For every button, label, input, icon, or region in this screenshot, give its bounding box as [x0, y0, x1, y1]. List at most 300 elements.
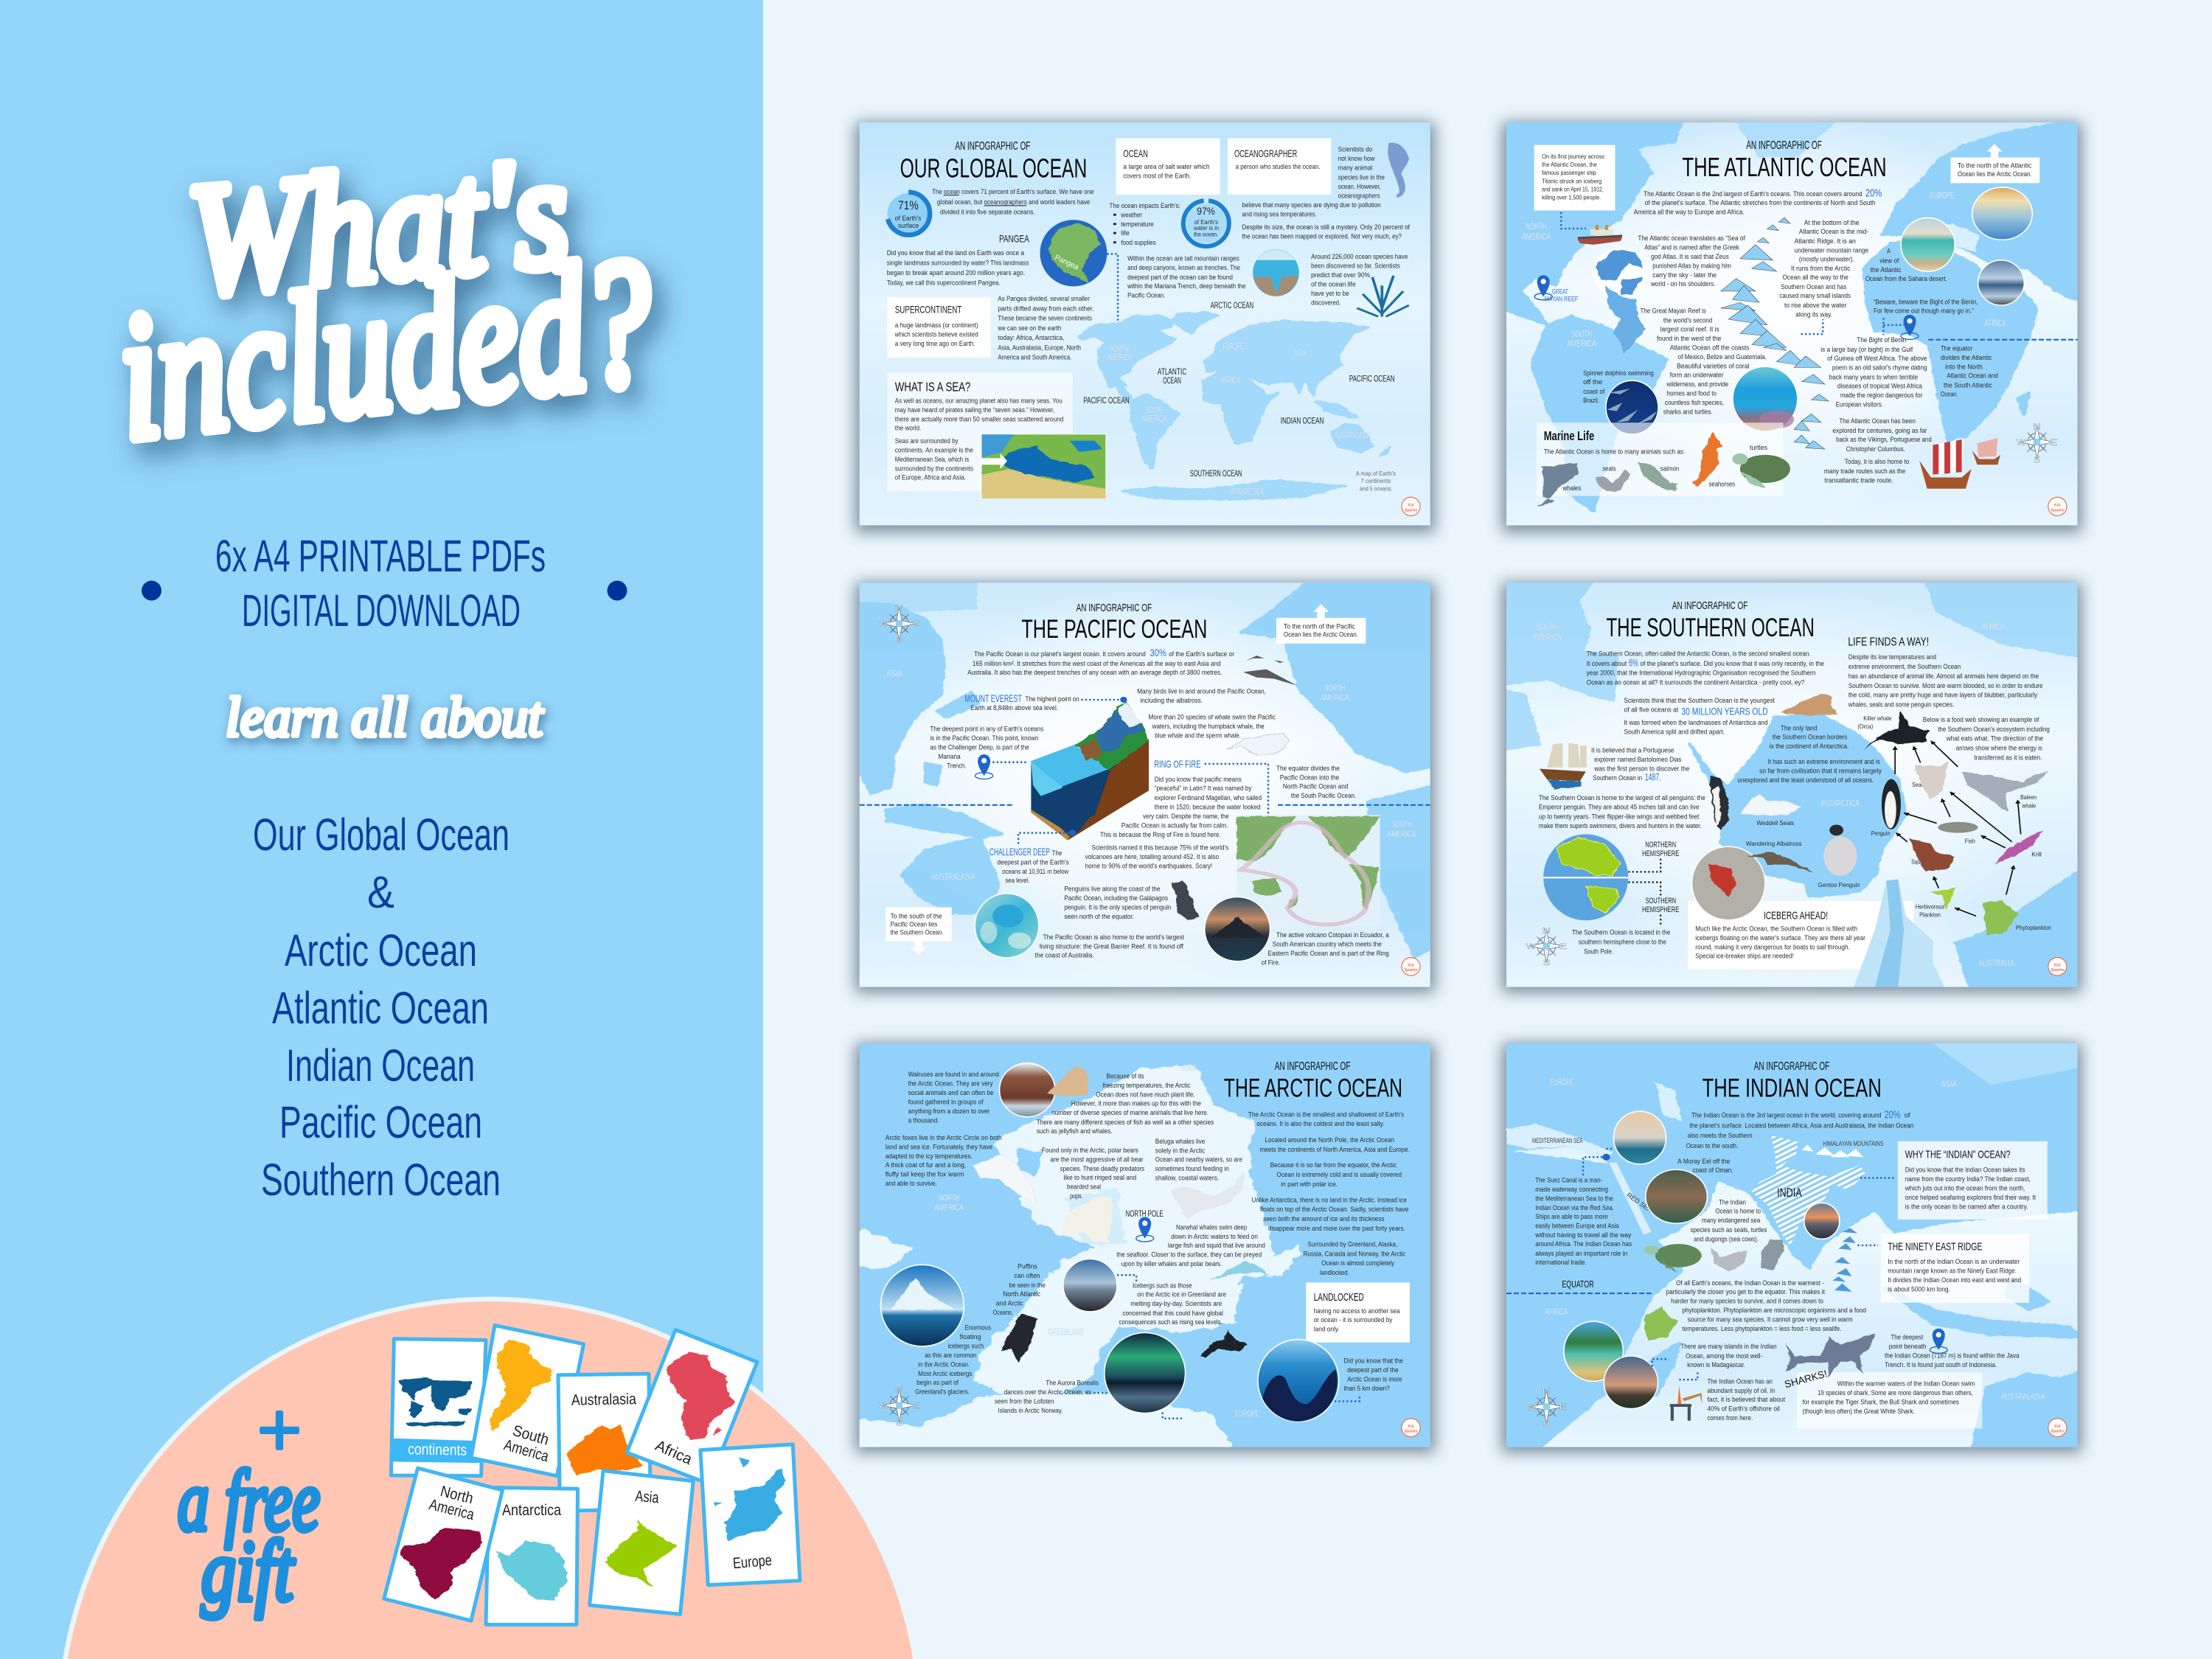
equator line [860, 804, 1430, 806]
text: Suez Canal: always played an important role in [1535, 1250, 1627, 1257]
map labels: PACIFIC OCEAN [1084, 396, 1130, 406]
intro text: year 2000, that the International Hydrographic Organisation recognised the Southern [1587, 669, 1815, 677]
box: south of Pacific [886, 908, 952, 942]
text: species discovered: been discovered so far. Scientists [1311, 262, 1400, 270]
definition box: oceanographer: a person who studies the ocean. [1236, 164, 1321, 171]
text: Great Mayan Reef: of Mexico, Belize and Guatemala. [1678, 354, 1767, 361]
intro text: Ocean as an ocean at all? It surrounds the continent Antarctica - pretty cool, ey? [1587, 679, 1804, 686]
text: whales: More than 20 species of whale swim the Pacific [1148, 714, 1276, 721]
card labels: South [511, 1422, 551, 1449]
text: species unknown: the ocean has been mapped or explored. Not very much, ey? [1242, 233, 1402, 240]
panel: The Southern Ocean: HEMISPHERE [1642, 905, 1679, 914]
impacts list: The ocean impacts Earth's: [1110, 202, 1180, 210]
land labels: AUSTRALIA [1979, 958, 2014, 968]
map labels: INDIAN OCEAN [1281, 417, 1324, 426]
map labels: ASIA [1294, 348, 1307, 358]
intro text: The Pacific Ocean is our planet's largest ocean. It covers around [974, 651, 1146, 658]
animal labels: Phytoplankton [2016, 925, 2051, 931]
text: Madagascar [1680, 1343, 1777, 1369]
text: Antarctica: the Southern Ocean borders [1773, 734, 1848, 741]
text: emperor penguins [1539, 795, 1705, 830]
text: equator [1941, 345, 1998, 398]
intro text [967, 647, 1234, 676]
marker: Challenger Deep [1018, 830, 1076, 844]
text: floating icebergs: begin as part of [917, 1380, 959, 1387]
text: food web intro: the Southern Ocean's ecosystem including [1938, 726, 2050, 733]
text: puffins: Puffins [1018, 1263, 1037, 1270]
text: southern hemisphere [1572, 929, 1670, 956]
text: Suez Canal: international trade. [1535, 1259, 1587, 1266]
map labels: OCEAN [1163, 376, 1181, 386]
text: oil [1707, 1378, 1786, 1422]
animal labels: Plankton [1919, 912, 1941, 919]
text: endangered species: species such as seals, turtles [1690, 1226, 1767, 1234]
box: sharks: Within the warmer waters of the Indian Ocean swim [1837, 1380, 1975, 1388]
logo: Kid Sparks: Kid [1408, 1425, 1414, 1428]
intro text: 20% [1865, 187, 1882, 199]
list of oceans: & [367, 867, 394, 917]
text: deepest part: Did you know that the [1344, 1357, 1403, 1365]
impacts list: life [1121, 230, 1130, 237]
gift text: + a free gift: gift [201, 1523, 296, 1619]
illustration: walrus [1046, 1065, 1089, 1096]
equator line [1928, 339, 2078, 341]
box: what is a sea: the world. [895, 425, 921, 432]
land labels: ASIA [1182, 1062, 1197, 1073]
box: iceberg ahead: Special ice-breaker ships are needed! [1695, 953, 1794, 960]
intro text [1686, 1108, 1913, 1150]
title: OUR GLOBAL OCEAN [900, 154, 1087, 184]
illustration: sailing ship [1540, 742, 1587, 789]
photo: island beach [1564, 1321, 1623, 1381]
map labels: MEDITERRANEAN SEA [1532, 1137, 1583, 1144]
box: supercontinent: which scientists believe existed [894, 331, 978, 338]
text: Antarctica: The only land [1781, 725, 1818, 732]
text: Arctic facts: Surrounded by Greenland, Alaska, [1307, 1241, 1397, 1248]
text: life finds a way: LIFE FINDS A WAY! [1848, 636, 1929, 649]
text: seven continents: These became the seven continents [998, 315, 1092, 322]
pale sea overlay [1921, 223, 1979, 251]
caption: map of Earth [1356, 470, 1396, 493]
text: Greenland icebergs: on the Arctic ice in Greenland are [1137, 1291, 1226, 1298]
animal labels: Fish [1965, 838, 1975, 845]
card: Asia [590, 1471, 693, 1614]
text: Madagascar: known is Madagascar. [1687, 1362, 1745, 1369]
box: why the Indian Ocean: WHY THE “INDIAN” OCEAN? [1905, 1148, 2011, 1161]
text: Suez Canal: The Suez Canal is a man- [1535, 1177, 1602, 1184]
land labels: AMERICA [1321, 693, 1349, 703]
text: explorers: Christopher Columbus. [1846, 445, 1905, 453]
text: Arctic foxes [886, 1135, 1002, 1188]
text: equator [1276, 765, 1356, 799]
text: polar bears [1042, 1147, 1144, 1200]
impacts list [1110, 202, 1180, 246]
text: Suez Canal [1534, 1177, 1632, 1266]
list of oceans: Arctic Ocean [285, 925, 477, 975]
text: Bartolomeo Dias [1591, 747, 1689, 783]
text: mid-Atlantic ridge [1779, 219, 1868, 319]
text: youngest ocean: Scientists think that the Southern Ocean is the youngest [1624, 698, 1775, 705]
text: Arctic facts: Ocean is extremely cold and is usually covered [1277, 1172, 1402, 1179]
food web arrows [1895, 741, 2021, 916]
logo: Kid Sparks: Kid [1408, 503, 1414, 507]
text: southern hemisphere: South Pole. [1584, 948, 1613, 956]
text: Ring of Fire: there in 1520, because the water looked [1155, 804, 1261, 811]
logo: Kid Sparks [1402, 1419, 1420, 1437]
list of oceans: Atlantic Ocean [272, 983, 489, 1033]
card labels: continents [408, 1441, 467, 1459]
text: beluga whales: Beluga whales live [1155, 1138, 1205, 1145]
box: landlocked: or ocean - it is surrounded by [1314, 1317, 1393, 1324]
text: youngest ocean: It was formed when the landmasses of Antarctica and [1624, 720, 1768, 727]
panel: The Atlantic Ocean: AFRICA [1984, 319, 2006, 329]
text: seven continents: Asia, Australasia, Europe, North [998, 344, 1081, 352]
text: endangered species: and dugongs (sea cows). [1694, 1236, 1759, 1243]
text: Great Mayan Reef: largest coral reef. It is [1660, 326, 1719, 333]
text: aurora: dances over the Arctic Ocean, as [1004, 1389, 1091, 1397]
text: narwhal whales: the seafloor. Closer to the surface, they can be preyed [1117, 1251, 1262, 1259]
text: trenches: Pacific Ocean. [1127, 292, 1165, 299]
compass: N [1543, 925, 1551, 935]
icon: location pin [975, 754, 993, 779]
donut chart: 97 percent [1181, 198, 1231, 248]
text: Arctic facts: Ocean is almost completely [1321, 1260, 1394, 1267]
text: Suez Canal: without having to travel all the way [1534, 1232, 1632, 1239]
text: Mount Everest: Earth at 8,848m above sea level. [970, 705, 1058, 712]
text: species discovered [1311, 253, 1408, 307]
animal labels: Wandering Albatross [1746, 841, 1802, 847]
text: Arctic facts: The Arctic Ocean is the smallest and shallowest of Earth's [1248, 1111, 1404, 1119]
text: deepest part: Arctic Ocean is more [1347, 1376, 1402, 1383]
text: floating icebergs: floating [960, 1334, 981, 1341]
panel: The Southern Ocean [1501, 580, 2081, 995]
text: species discovered: of the ocean life [1311, 281, 1356, 288]
background land masses [1501, 580, 2081, 991]
box: sharks [1784, 1368, 1982, 1428]
text: Arctic facts: Located around the North Pole, the Arctic Ocean [1265, 1137, 1394, 1144]
text: Great Mayan Reef: homes and food to [1667, 390, 1717, 397]
text: Great Mayan Reef: the world's second [1663, 317, 1712, 324]
text: seven continents: America and South America. [998, 354, 1071, 361]
panel: The Pacific Ocean [854, 580, 1436, 995]
text: Challenger Deep: The [1052, 850, 1062, 857]
compass [879, 1385, 919, 1427]
box: why the Indian Ocean: name from the country India? The Indian coast, [1905, 1176, 2031, 1183]
photo: sunset sea [1972, 187, 2032, 240]
animal labels: Squid [1911, 859, 1924, 866]
text: Bight of Benin: made the region dangerous for [1840, 392, 1922, 400]
text: Challenger Deep: oceans at 10,911 m below [1002, 869, 1069, 875]
compass [879, 602, 919, 644]
card: Europe [700, 1444, 800, 1585]
card labels: America [428, 1496, 476, 1523]
box: iceberg ahead [1688, 901, 1913, 970]
text: Challenger Deep: sea level. [1005, 877, 1029, 885]
text: equator: Ocean. [1941, 391, 1958, 398]
panel: The Pacific Ocean: AMERICA [1388, 829, 1416, 839]
animal labels: Baleen [2020, 795, 2037, 801]
donut chart: 97 percent: the ocean. [1194, 232, 1218, 238]
illustration: shark [1786, 1333, 1875, 1377]
title: AN INFOGRAPHIC OF [1275, 1060, 1350, 1072]
text: floating icebergs: icebergs such [947, 1343, 984, 1350]
box: sharks: SHARKS! [1784, 1368, 1829, 1390]
text: marine animals: There are many different species of fish as well as a other species [1037, 1119, 1214, 1126]
illustration: Titanic [1577, 225, 1622, 245]
land labels: ANTARCTICA [1820, 799, 1860, 809]
text: Challenger Deep [990, 846, 1069, 885]
title: AN INFOGRAPHIC OF [1672, 599, 1747, 611]
card: continents cover [391, 1339, 486, 1476]
map labels [1532, 1137, 1883, 1214]
text: whales: waters, including the humpback whale, the [1152, 723, 1265, 730]
text: deepest point: is in the Pacific Ocean. This point, known [930, 735, 1038, 742]
text block: product format: 6x A4 PRINTABLE PDFs [215, 531, 546, 581]
text: explorers: The Atlantic Ocean has been [1839, 417, 1916, 425]
box: what is a sea: of Europe, Africa and Asia. [895, 474, 966, 481]
text: puffins: be seen in the [1009, 1281, 1046, 1289]
text: Bight of Benin: back many years to when terrible [1829, 374, 1918, 381]
text: walruses [908, 1071, 999, 1124]
text: trenches: and deep canyons, known as trenches. The [1127, 265, 1240, 272]
text: Arctic facts: landlocked. [1320, 1269, 1349, 1276]
box: Marine Life: seals [1602, 465, 1616, 473]
text: puffins: can often [1014, 1273, 1040, 1279]
icon: seal [1596, 469, 1630, 492]
map labels: SOUTHERN OCEAN [1190, 469, 1242, 479]
box: Ninety East Ridge: is about 5000 km long. [1888, 1286, 1950, 1293]
title: THE ARCTIC OCEAN [1224, 1074, 1402, 1103]
intro text: 165 million km². It stretches from the west coast of the Americas all the way to east Asia and [973, 660, 1221, 667]
text: Cotopaxi: of Fire. [1262, 959, 1280, 967]
text: equator: Pacific Ocean into the [1280, 774, 1339, 782]
panel: The Atlantic Ocean [1501, 111, 2081, 525]
text: Arctic facts: disappear more and more over the past forty years. [1268, 1225, 1405, 1233]
intro text: also meets the Southern [1688, 1133, 1753, 1139]
map labels: INDIA [1777, 1186, 1802, 1200]
logo: Kid Sparks [2048, 497, 2067, 515]
location: Great Mayan Reef [1534, 275, 1578, 303]
location: Great Mayan Reef: MAYAN REEF [1545, 296, 1578, 303]
text: penguins: Penguins live along the coast of the [1064, 886, 1161, 893]
text: view from Sahara [1865, 248, 1947, 283]
land labels: SOUTH [1391, 820, 1412, 830]
box: why the Indian Ocean: Did you know that the Indian Ocean takes its [1905, 1166, 2025, 1174]
title: THE ATLANTIC OCEAN [1682, 153, 1887, 182]
text: warmest ocean [1666, 1279, 1866, 1332]
text: penguins: penguin. It is the only species of penguin [1064, 904, 1171, 911]
box: iceberg ahead: icebergs floating on the water's surface. They are there all year [1695, 935, 1865, 942]
photo: walruses [1000, 1063, 1055, 1117]
text: Greenland icebergs: concerned that this could have global [1122, 1310, 1223, 1317]
compass: E [1559, 941, 1567, 950]
diagram: deep ocean [1258, 1340, 1339, 1422]
text: moray eel: coast of Oman. [1693, 1167, 1733, 1174]
box: landlocked: having no access to another sea [1314, 1307, 1400, 1315]
text: Java Trench [1885, 1334, 2020, 1368]
box: Marine Life: Marine Life [1544, 429, 1594, 443]
box: Titanic: and sank on April 15, 1912, [1542, 187, 1604, 193]
icon: turtle [1732, 453, 1790, 489]
box: landlocked: LANDLOCKED [1314, 1291, 1364, 1304]
text: Antarctica [1737, 725, 1882, 785]
intro text: Ocean to the south. [1686, 1142, 1738, 1150]
icon: whale [1537, 463, 1578, 507]
photo: iceberg [880, 1265, 964, 1346]
illustration: phytoplankton [1644, 1307, 1678, 1340]
box: Titanic: Titanic struck an iceberg [1542, 178, 1601, 185]
animal labels: Seal [1912, 782, 1922, 788]
text: narwhal whales: down in Arctic waters to feed on [1171, 1234, 1258, 1240]
intro text [1587, 650, 1824, 686]
label: equator: EQUATOR [1562, 1279, 1594, 1290]
panel shadows [855, 122, 2081, 1453]
compass: W [1526, 1402, 1537, 1412]
compass: W [1526, 941, 1537, 950]
photo: baobab [1604, 1356, 1658, 1409]
land labels: AMERICA [1522, 232, 1551, 243]
text: walruses: found gathered in groups of [908, 1099, 984, 1106]
donut chart: 71 percent [887, 192, 930, 235]
text: Atlas: carry the sky - later the [1652, 271, 1717, 279]
text: emperor penguins: Emperor penguin. They are about 45 inches tall and can live [1539, 804, 1699, 811]
land labels: NORTH [939, 1193, 960, 1203]
background land masses [1501, 1039, 2083, 1451]
illustration: narwhal [1208, 1261, 1270, 1281]
logo: Kid Sparks [1402, 958, 1420, 975]
text: explorers: Today, it is also home to [1845, 459, 1910, 466]
text: equator: The equator divides the [1276, 765, 1340, 772]
PANGEA text: Today, we call this supercontinent Pangea. [887, 279, 1001, 287]
icon: large viking ship [1919, 439, 1972, 489]
text: penguins: Pacific Ocean, including the Galápagos [1064, 895, 1168, 902]
compass: S [896, 1418, 903, 1427]
text: Great Barrier Reef: living structure: the Great Barrier Reef. It is found off [1040, 943, 1184, 950]
box: why the Indian Ocean: which juts out into the ocean from the north, [1905, 1185, 2025, 1192]
animal labels [1746, 715, 2051, 931]
intro text: the planet's surface. Located between Africa, Asia and Australasia, the Indian Ocean [1689, 1122, 1913, 1130]
land labels: AFRICA [1545, 1307, 1568, 1317]
text: Antarctica: It has such an extreme environment and is [1768, 759, 1880, 765]
text: warmest ocean: particularly the closer you get to the equator. This makes it [1666, 1289, 1826, 1296]
text: species unknown [1242, 146, 1411, 240]
text: view from Sahara: Ocean from the Sahara desert. [1865, 276, 1947, 283]
text: Challenger Deep: deepest part of the Earth's [997, 859, 1069, 866]
text: emperor penguins: make them superb swimmers, divers and hunters in the water. [1539, 823, 1702, 830]
compass: E [2050, 438, 2057, 448]
text: marine animals: such as jellyfish and whales. [1037, 1128, 1113, 1135]
labels: hemispheres [1628, 839, 1679, 925]
intro text: The ocean covers 71 percent of Earth's surface. We have one [932, 188, 1094, 195]
text block: product format: DIGITAL DOWNLOAD [242, 585, 521, 636]
text: Suez Canal: the Mediterranean Sea to the [1535, 1195, 1613, 1203]
compass: N [895, 1385, 903, 1395]
definition box: oceanographer: OCEANOGRAPHER [1234, 148, 1297, 159]
text: view from Sahara: the Atlantic [1871, 266, 1902, 274]
text: Bartolomeo Dias: It is believed that a Portuguese [1591, 747, 1674, 754]
food web animals [1863, 710, 2049, 935]
text: Ring of Fire: home to 90% of the world's earthquakes. Scary! [1085, 863, 1212, 870]
text: life finds a way: the cold, many are pretty huge and have layers of blubber, particularly [1848, 692, 2037, 699]
compass: W [879, 619, 889, 628]
text: Suez Canal: easily between Europe and Asia [1535, 1222, 1619, 1230]
logo: Kid Sparks: Sparks [2051, 1429, 2064, 1433]
heading: What's included?: included? [109, 220, 662, 477]
text: Antarctica: unexplored and the least understood of all oceans. [1737, 777, 1874, 785]
land labels: ASIA [1941, 1079, 1957, 1089]
text: mid-Atlantic ridge: It runs from the Arctic [1791, 265, 1851, 272]
box: what is a sea: continents. An example is the [895, 447, 973, 454]
pale seas [1506, 1043, 2078, 1235]
text: view from Sahara: A [1887, 248, 1891, 255]
card labels: Australasia [571, 1391, 636, 1409]
text: Bight of Benin: The Bight of Benin [1857, 337, 1906, 344]
logo: Kid Sparks: Kid [1408, 963, 1414, 967]
animal labels: Penguin [1871, 831, 1890, 838]
text: floating icebergs: in the Arctic Ocean. [918, 1361, 970, 1368]
box: what is a sea: may have heard of pirates sailing the “seven seas.” However, [895, 407, 1054, 414]
text: beluga whales: sometimes found feeding in [1155, 1165, 1229, 1172]
box: north of Atlantic: To the north of the Atlantic [1958, 162, 2031, 170]
box: sharks: (though less often) the Great White Shark. [1803, 1408, 1915, 1415]
intro text: of the planet's surface. Did you know that it was only recently, in the [1640, 660, 1824, 667]
text: trenches [1127, 255, 1246, 299]
text: narwhal whales: upon by killer whales and polar bears. [1121, 1260, 1222, 1267]
card: Antarctica [486, 1487, 578, 1624]
box: south of Pacific: To the south of the [891, 913, 942, 920]
animal labels: Krill [2031, 852, 2042, 858]
illustration: turtle [1644, 1244, 1702, 1273]
illustration: Himalayas [1802, 1144, 1863, 1157]
definition box: ocean [1116, 138, 1220, 195]
box: what is a sea: WHAT IS A SEA? [895, 380, 970, 394]
box: Ninety East Ridge [1881, 1234, 2029, 1303]
land labels: AMERICA [1568, 338, 1596, 349]
animal labels: Herbivorous [1916, 904, 1944, 911]
title: THE INDIAN OCEAN [1703, 1074, 1882, 1103]
intro text [1634, 187, 1882, 216]
intro text: The Atlantic Ocean is the 2nd largest of Earth's oceans. This ocean covers around [1644, 190, 1863, 198]
text: narwhal whales [1117, 1224, 1265, 1267]
gift text: + a free gift [178, 1387, 320, 1619]
heading: What's included?: What's [182, 122, 574, 328]
bullet dot left [142, 581, 161, 600]
text: polar bears: pups. [1070, 1193, 1082, 1200]
box: sharks: for example the Tiger Shark, the Bull Shark and sometimes [1803, 1399, 1959, 1406]
text: Suez Canal: made waterway connecting [1535, 1186, 1608, 1193]
box: landlocked: land only. [1314, 1326, 1340, 1333]
panel: Our Global Ocean [860, 122, 1430, 525]
compass: N [895, 602, 903, 612]
text: Ring of Fire: Did you know that pacific means [1155, 776, 1242, 783]
panel: Our Global Ocean: PACIFIC OCEAN [1349, 374, 1395, 384]
labels: hemispheres: NORTHERN [1645, 839, 1676, 849]
text: Greenland icebergs: consequences such as rising sea levels. [1119, 1318, 1222, 1326]
text: trenches: Within the ocean are tall mountain ranges [1127, 255, 1239, 262]
intro text: of the Earth's surface or [1169, 651, 1234, 658]
text: beluga whales: solely in the Arctic [1155, 1147, 1205, 1155]
text: walruses: anything from a dozen to over [908, 1107, 990, 1115]
box: north of Atlantic [1950, 158, 2039, 183]
text: species unknown: believe that many species are dying due to pollution [1242, 201, 1381, 209]
text: rhyme: For few come out though many go in.” [1874, 307, 1974, 315]
compass [2017, 422, 2057, 465]
text: Madagascar: Ocean, among the most well- [1686, 1352, 1762, 1360]
labels: hemispheres: SOUTHERN [1646, 895, 1676, 905]
text: Bight of Benin: diseases of tropical West Africa [1837, 383, 1922, 390]
text: aurora [995, 1380, 1099, 1414]
card: North America [384, 1468, 502, 1621]
